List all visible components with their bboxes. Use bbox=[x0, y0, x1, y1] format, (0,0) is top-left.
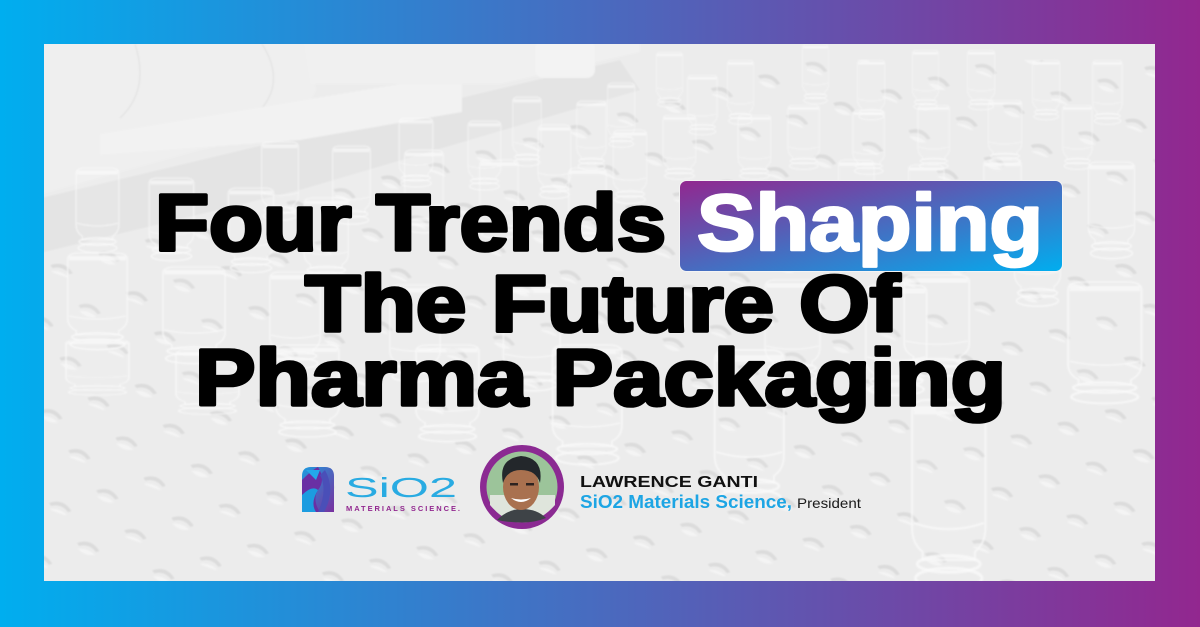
logo tagline: MATERIALS SCIENCE. bbox=[346, 504, 460, 513]
background photo: vials on conveyor bbox=[44, 44, 1155, 581]
title line 1: Four Trends bbox=[155, 178, 666, 267]
speaker organization and role: President bbox=[797, 495, 861, 511]
right vials bbox=[658, 54, 682, 106]
highlighted word: Shaping: Shaping bbox=[697, 178, 1043, 267]
machinery: pale tubes and block bbox=[20, 20, 316, 200]
left vials bbox=[76, 168, 119, 253]
title bbox=[155, 178, 1006, 422]
title line 2: The Future Of bbox=[305, 259, 900, 348]
speaker name: LAWRENCE GANTI bbox=[580, 474, 758, 491]
portrait: Lawrence Ganti bbox=[480, 445, 564, 529]
title line 3: Pharma Packaging bbox=[195, 333, 1006, 422]
logo icon bbox=[302, 467, 334, 512]
logo wordmark: SiO2 bbox=[345, 472, 457, 503]
logo: SiO2 Materials Science bbox=[302, 467, 460, 513]
dark band behind vials bbox=[20, 60, 640, 258]
speaker organization and role: SiO2 Materials Science, bbox=[580, 491, 792, 512]
